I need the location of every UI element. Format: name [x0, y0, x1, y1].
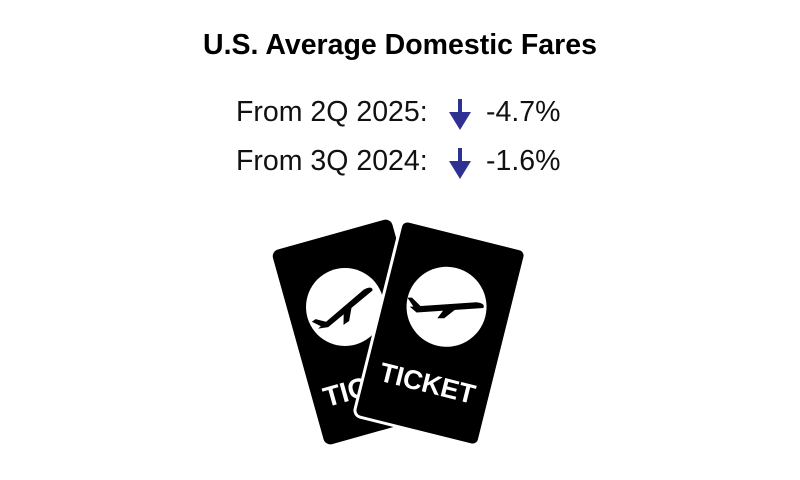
icon: down arrow [449, 99, 471, 130]
stat row: from 2Q 2025: From 2Q 2025: [236, 96, 428, 128]
stat row: from 2Q 2025: -4.7% [486, 96, 560, 128]
icon: down arrow [449, 148, 471, 179]
stat row: from 2Q 2025 [236, 96, 560, 130]
icon: plane taking off [312, 283, 380, 339]
stat row: from 3Q 2024: From 3Q 2024: [236, 145, 428, 177]
ticket label: TICKET [376, 357, 479, 410]
icon: plane [407, 298, 484, 318]
front ticket [353, 220, 527, 446]
title: U.S. Average Domestic Fares [203, 29, 597, 61]
back ticket: TICKET [320, 356, 426, 413]
stat row: from 3Q 2024 [236, 145, 560, 179]
stat row: from 3Q 2024: -1.6% [486, 145, 560, 177]
back ticket [271, 218, 445, 446]
